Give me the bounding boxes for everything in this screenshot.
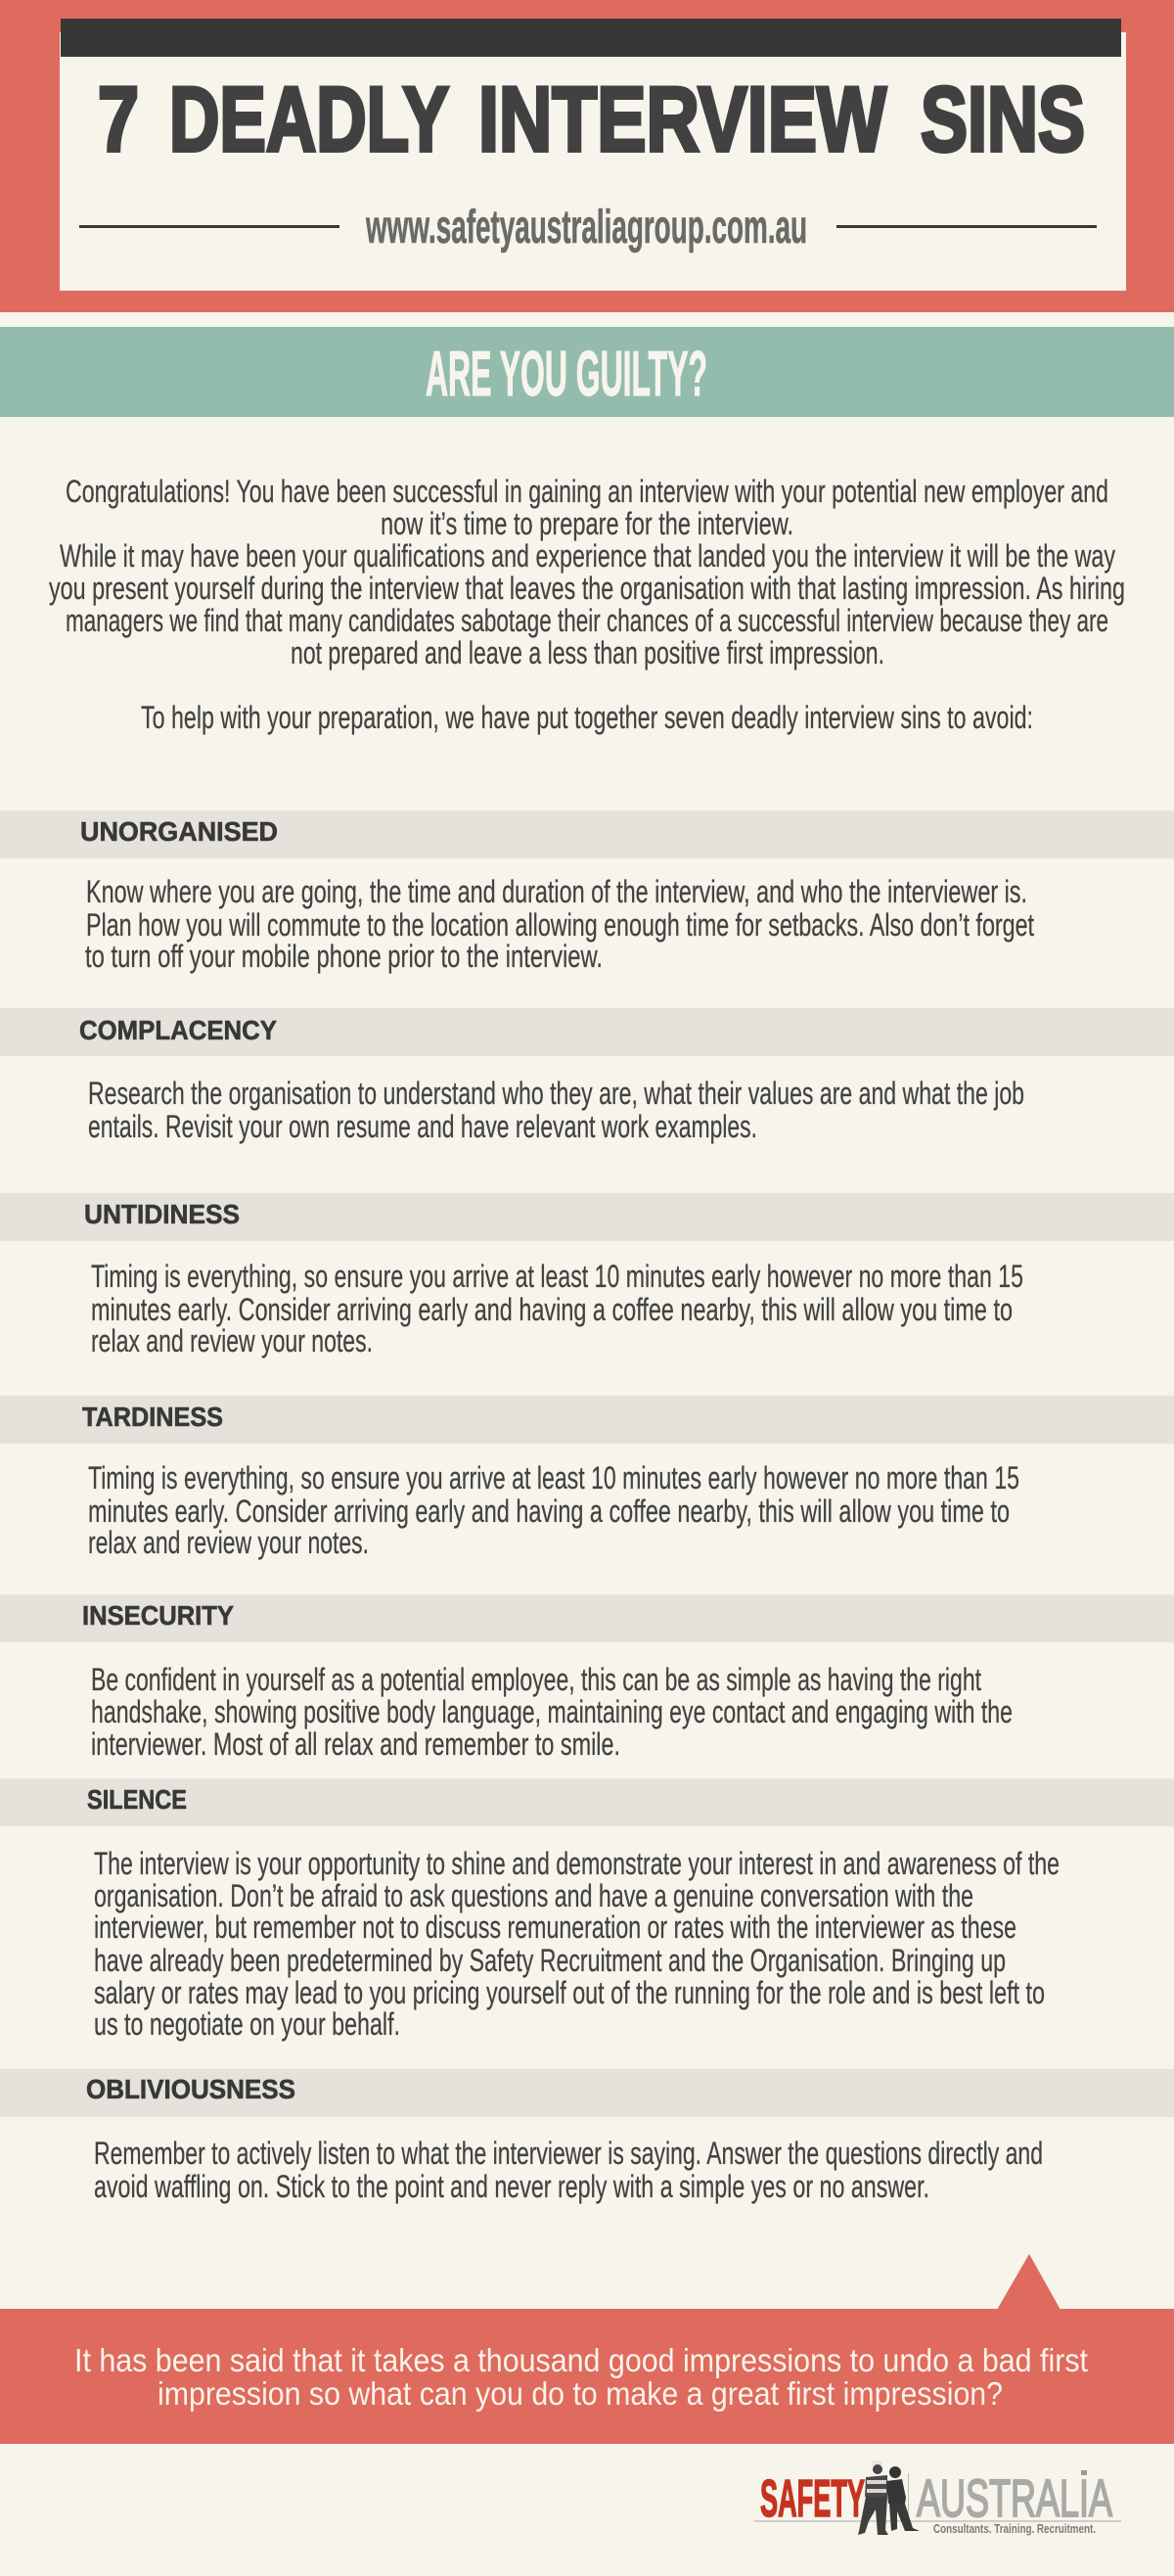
section: silence	[0, 1778, 1174, 2042]
callout: closing question: impression so what can you do to make a great first impression?	[158, 2375, 1003, 2412]
section: obliviousness	[0, 2069, 1174, 2204]
title: SINS	[921, 68, 1085, 170]
section: silence: us to negotiate on your behalf.	[94, 2006, 400, 2042]
callout: closing question: It has been said that it takes a thousand good impressions to undo a bad first	[74, 2342, 1088, 2378]
section: unorganised: to turn off your mobile phone prior to the interview.	[85, 939, 603, 974]
section: obliviousness: OBLIVIOUSNESS	[86, 2074, 295, 2104]
title	[98, 68, 1085, 170]
icon: worker figures	[858, 2461, 920, 2535]
section: complacency: COMPLACENCY	[79, 1015, 277, 1045]
section: tardiness: relax and review your notes.	[88, 1525, 369, 1560]
section: untidiness: UNTIDINESS	[84, 1199, 240, 1229]
website url: www.safetyaustraliagroup.com.au	[365, 202, 807, 253]
section: insecurity	[0, 1594, 1174, 1762]
section: insecurity: INSECURITY	[82, 1600, 234, 1631]
section: tardiness	[0, 1396, 1174, 1560]
section: silence: SILENCE	[87, 1784, 187, 1815]
intro text: not prepared and leave a less than positive first impression.	[291, 635, 884, 670]
section: untidiness: relax and review your notes.	[91, 1323, 373, 1358]
title panel	[60, 32, 1126, 291]
logo tagline: Consultants. Training. Recruitment.	[933, 2521, 1096, 2536]
section: complacency	[0, 1008, 1174, 1144]
callout: closing question	[0, 2254, 1174, 2444]
subtitle band: are you guilty	[0, 327, 1174, 417]
section: untidiness	[0, 1193, 1174, 1358]
section: unorganised	[0, 810, 1174, 974]
logo: safety australia: SAFETY	[760, 2469, 865, 2528]
section: complacency: entails. Revisit your own resume and have relevant work examples.	[88, 1109, 757, 1144]
intro text: now it’s time to prepare for the interview.	[381, 506, 793, 541]
section: tardiness: TARDINESS	[82, 1402, 223, 1432]
section: unorganised: UNORGANISED	[80, 816, 278, 847]
title: DEADLY	[169, 68, 449, 170]
intro text	[49, 474, 1125, 735]
header: red title banner	[0, 0, 1174, 312]
section: insecurity: interviewer. Most of all relax and remember to smile.	[91, 1726, 620, 1762]
title: 7	[98, 68, 139, 170]
title: INTERVIEW	[478, 68, 886, 170]
dark top bar	[61, 19, 1121, 57]
subtitle band: are you guilty: ARE YOU GUILTY?	[426, 338, 707, 409]
logo: safety australia	[754, 2461, 1121, 2536]
